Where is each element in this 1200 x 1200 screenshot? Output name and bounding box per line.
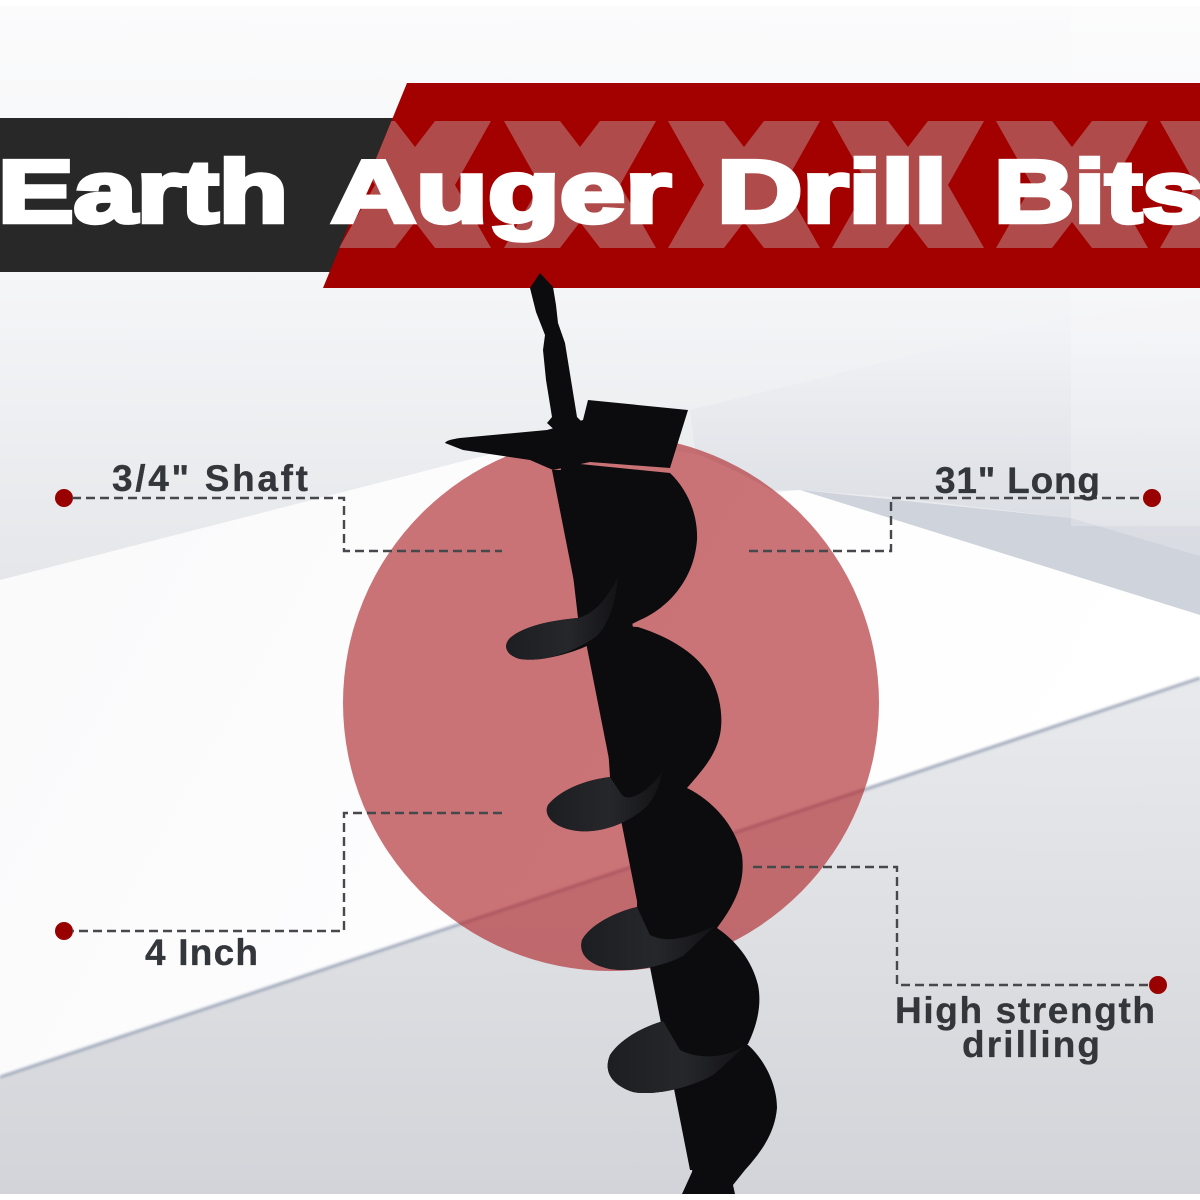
auger shaft (552, 470, 740, 1170)
auger flight 4 (608, 920, 759, 1093)
callout: 4 inch: 4 Inch (145, 932, 258, 973)
auger flight 3 (581, 780, 743, 970)
red circle (343, 435, 879, 971)
icon: black auger drill bit (445, 273, 777, 1194)
auger flight 1 (506, 462, 697, 660)
auger flight 2 (547, 625, 721, 831)
banner pattern: crosses (339, 121, 1200, 248)
callout: 3/4 inch shaft (55, 458, 502, 551)
title: Bits (994, 142, 1200, 241)
callout: 3/4 inch shaft: 3/4" Shaft (112, 458, 308, 499)
auger cutting blades (445, 400, 688, 470)
auger flight highlights (506, 577, 745, 1093)
callout: high strength drilling (753, 867, 1167, 1065)
title: Earth (0, 142, 288, 241)
callout: 31 inch long: 31" Long (935, 460, 1100, 501)
callout: high strength drilling: High strength (895, 990, 1155, 1031)
callout: 31 inch long (749, 460, 1161, 551)
callout: high strength drilling: drilling (962, 1024, 1100, 1065)
title: Auger (331, 142, 671, 241)
callout: 4 inch (55, 813, 502, 973)
auger tip (530, 273, 585, 435)
auger flight 5 (682, 1040, 777, 1194)
title (0, 142, 1200, 241)
banner: title ribbon (0, 83, 1200, 288)
title: Drill (717, 142, 947, 241)
